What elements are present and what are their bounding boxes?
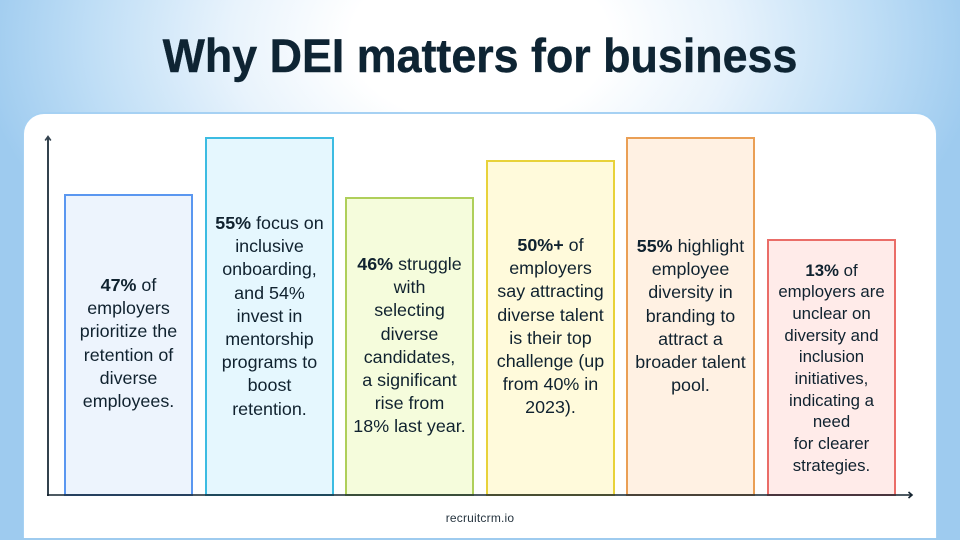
- text: 55% onboarding: onboarding,: [222, 259, 317, 279]
- text: 55% onboarding: and 54%: [234, 283, 305, 303]
- text: 55% employee diversity branding: branding to: [646, 306, 735, 326]
- text: 55% onboarding: mentorship: [225, 329, 314, 349]
- text: 13% unclear on initiatives: employers are: [778, 282, 885, 301]
- text: 47% retention: retention of: [84, 345, 173, 365]
- text: 13% unclear on initiatives: for clearer: [794, 434, 869, 453]
- text: 46% selecting candidates: a significant: [362, 370, 457, 390]
- text: 50%+ attracting talent: [497, 235, 604, 417]
- bar: 55% onboarding: [205, 137, 334, 496]
- text: 46% selecting candidates: 46% struggle: [357, 254, 462, 274]
- text: 55% onboarding: retention.: [232, 399, 307, 419]
- text: 55% onboarding: 55% focus on: [215, 213, 324, 233]
- bar: 13% unclear on initiatives: [767, 239, 896, 496]
- text: 55% employee diversity branding: broader talent: [635, 352, 746, 372]
- text: 13% unclear on initiatives: inclusion: [799, 347, 864, 366]
- title: Why DEI matters for business: [163, 30, 797, 83]
- text: 55% employee diversity branding: pool.: [671, 375, 710, 395]
- text: 47% retention: 47% of: [101, 275, 156, 295]
- text: 55% onboarding: boost: [248, 375, 291, 395]
- text: 50%+ attracting talent: diverse talent: [497, 305, 604, 325]
- panel: chart card: [24, 114, 936, 538]
- text: 46% selecting candidates: [353, 254, 466, 436]
- text: 13% unclear on initiatives: initiatives,: [795, 369, 868, 388]
- text: 13% unclear on initiatives: need: [813, 412, 850, 431]
- y axis arrow: [45, 136, 51, 496]
- text: 47% retention: prioritize the: [80, 321, 177, 341]
- bar: 46% selecting candidates: [345, 197, 474, 496]
- text: 55% employee diversity branding: diversity in: [648, 282, 733, 302]
- text: 55% employee diversity branding: attract a: [658, 329, 723, 349]
- text: 13% unclear on initiatives: diversity and: [784, 326, 879, 345]
- text: 13% unclear on initiatives: strategies.: [793, 456, 870, 475]
- text: 46% selecting candidates: rise from: [375, 393, 444, 413]
- text: 46% selecting candidates: candidates,: [364, 347, 455, 367]
- text: 46% selecting candidates: selecting: [374, 300, 445, 320]
- text: 47% retention: diverse: [100, 368, 157, 388]
- text: 55% onboarding: programs to: [222, 352, 317, 372]
- bar: 50%+ attracting talent: [486, 160, 614, 496]
- text: 46% selecting candidates: with: [394, 277, 425, 297]
- text: 13% unclear on initiatives: 13% of: [805, 260, 858, 280]
- text: 50%+ attracting talent: challenge (up: [497, 351, 604, 371]
- text: 55% onboarding: [215, 213, 324, 419]
- text: 13% unclear on initiatives: [778, 260, 885, 475]
- text: 47% retention: [80, 275, 177, 411]
- text: 50%+ attracting talent: from 40% in: [503, 374, 598, 394]
- text: 55% onboarding: inclusive: [235, 236, 304, 256]
- text: 55% onboarding: invest in: [237, 306, 302, 326]
- text: 50%+ attracting talent: is their top: [509, 328, 592, 348]
- text: 46% selecting candidates: diverse: [381, 324, 438, 344]
- text: 50%+ attracting talent: 2023).: [525, 397, 576, 417]
- bar: 55% employee diversity branding: [626, 137, 754, 496]
- text: 50%+ attracting talent: 50%+ of: [517, 235, 584, 255]
- x axis arrow: [47, 492, 912, 498]
- text: 55% employee diversity branding: 55% highlight: [637, 236, 744, 256]
- footer source: recruitcrm.io: [446, 511, 514, 525]
- text: 55% employee diversity branding: employee: [652, 259, 729, 279]
- text: 55% employee diversity branding: [635, 236, 746, 395]
- text: 47% retention: employers: [87, 298, 170, 318]
- text: 50%+ attracting talent: say attracting: [497, 281, 604, 301]
- text: 50%+ attracting talent: employers: [509, 258, 592, 278]
- text: 47% retention: employees.: [83, 391, 174, 411]
- text: 13% unclear on initiatives: unclear on: [792, 304, 871, 323]
- text: 46% selecting candidates: 18% last year.: [353, 416, 466, 436]
- bar: 47% retention: [64, 194, 192, 496]
- text: 13% unclear on initiatives: indicating a: [789, 391, 874, 410]
